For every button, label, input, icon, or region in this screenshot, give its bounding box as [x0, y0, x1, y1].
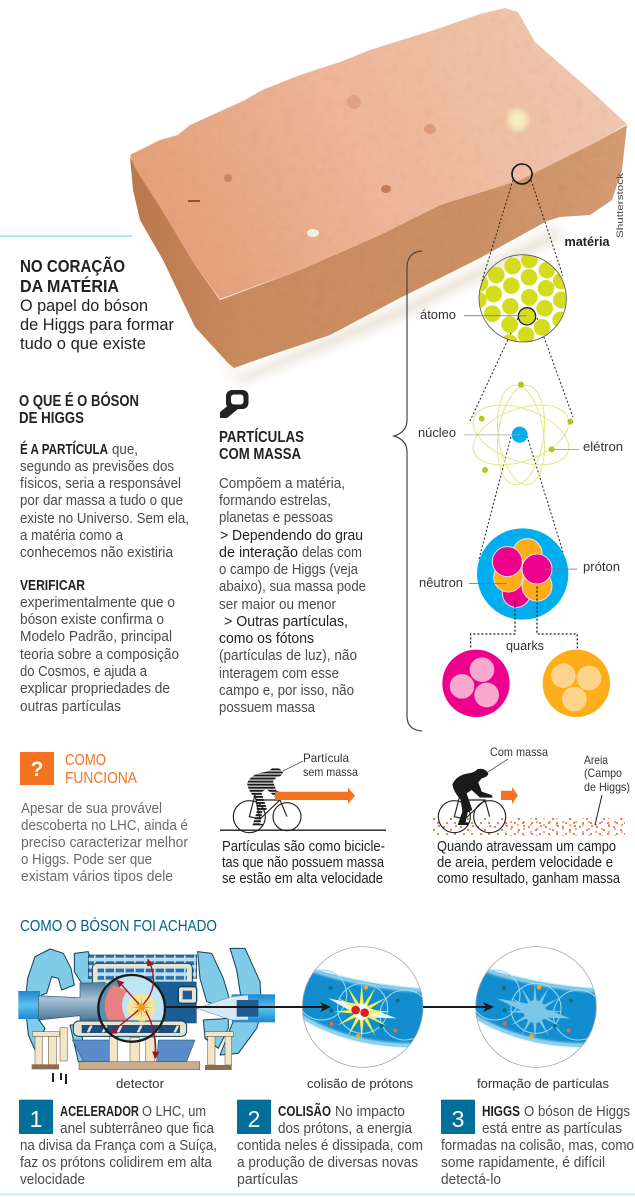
panel: step 3 higgs: 3 — [452, 1106, 464, 1132]
bottom rule — [0, 1194, 635, 1195]
panel: step 3 higgs: detectá-lo — [441, 1172, 501, 1188]
panel: partículas com massa: interagem com esse — [219, 666, 339, 682]
panel: o que é o bóson de Higgs: físicos, seria a responsável — [20, 476, 181, 492]
arrow: slow — [501, 787, 518, 804]
panel: partículas com massa: abaixo), sua massa pode — [219, 579, 366, 595]
panel: step 2 colisão: 2 — [248, 1106, 260, 1132]
panel: o que é o bóson de Higgs: a matéria como a — [20, 528, 124, 544]
diagram: nucleus — [469, 528, 577, 648]
panel: o que é o bóson de Higgs: segundo as previsões dos — [20, 459, 174, 475]
panel: partículas com massa: (partículas de luz), não — [219, 648, 357, 664]
top rule — [0, 236, 132, 237]
panel: step 1 acelerador: na divisa da França com a Suíça, — [20, 1138, 217, 1154]
arrow: beam line — [165, 1002, 494, 1012]
panel: step 1 acelerador: O LHC, um — [142, 1104, 206, 1120]
text: cyclist with mass caption: de areia, perdem velocidade e — [437, 855, 613, 871]
panel: partículas com massa: como os fótons — [219, 631, 314, 647]
panel: partículas com massa: > Outras partículas, — [224, 614, 348, 630]
title: NO CORAÇÃO — [20, 255, 125, 276]
icon: magnifier — [220, 390, 248, 418]
label: colisão de prótons: colisão de prótons — [307, 1076, 413, 1091]
panel: partículas com massa: planetas e pessoas — [219, 510, 333, 526]
illustration: cyclist without mass — [220, 751, 386, 833]
title: tudo o que existe — [20, 334, 146, 353]
panel: partículas com massa: o campo de Higgs (veja — [219, 562, 359, 578]
panel: como funciona: o Higgs. Pode ser que — [21, 852, 152, 868]
panel: step 2 colisão — [237, 1099, 423, 1188]
panel: como funciona: preciso caracterizar melhor — [21, 835, 188, 851]
title: DA MATÉRIA — [20, 275, 119, 296]
panel: o que é o bóson de Higgs: DE HIGGS — [19, 410, 84, 427]
illustration: detector — [18, 948, 275, 1070]
panel: o que é o bóson de Higgs: explicar propriedades de — [20, 681, 170, 697]
panel: como funciona: existam vários tipos dele — [21, 869, 173, 885]
icon: tiny people beside detector — [52, 1073, 67, 1084]
panel: step 1 acelerador: ACELERADOR — [60, 1104, 139, 1120]
panel: como funciona: COMO — [65, 752, 106, 769]
icon: question box — [20, 752, 54, 785]
label: elétron: elétron — [583, 439, 623, 454]
illustration: cyclist without mass: Partícula — [303, 751, 349, 765]
panel: como funciona: FUNCIONA — [65, 770, 137, 787]
panel: partículas com massa: > Dependendo do grau — [220, 528, 363, 544]
label: detector: detector — [116, 1076, 165, 1091]
panel: step 1 acelerador: anel subterrâneo que fica — [60, 1121, 215, 1137]
panel: o que é o bóson de Higgs: outras partículas — [20, 699, 121, 715]
icon: question box: ? — [31, 758, 43, 781]
label: formação de partículas: formação de partículas — [477, 1076, 609, 1091]
photo: brick — [130, 8, 627, 385]
diagram: quark magenta — [442, 650, 510, 717]
panel: step 2 colisão: No impacto — [335, 1104, 405, 1120]
panel: partículas com massa: de interação — [219, 545, 298, 561]
panel: o que é o bóson de Higgs: teoria sobre a composição — [20, 647, 179, 663]
title: de Higgs para formar — [20, 315, 174, 334]
panel: step 2 colisão: contida neles é dissipada, com — [237, 1138, 423, 1154]
text: cyclist with mass caption: Quando atravessam um campo — [437, 839, 616, 855]
panel: step 2 colisão: a produção de diversas novas — [237, 1155, 418, 1171]
title: O papel do bóson — [20, 296, 148, 315]
panel: o que é o bóson de Higgs: existe no Universo. Sem ela, — [20, 511, 189, 527]
panel: step 1 acelerador — [19, 1099, 217, 1188]
text: cyclist without mass caption — [222, 839, 385, 887]
panel: partículas com massa: possuem massa — [219, 700, 316, 716]
text: cyclist without mass caption: tas que não possuem massa — [222, 855, 385, 871]
panel: o que é o bóson de Higgs: experimentalmente que o — [20, 595, 175, 611]
panel: partículas com massa: PARTÍCULAS — [219, 427, 304, 446]
panel: step 2 colisão: partículas — [237, 1172, 298, 1188]
illustration: particle formation circle — [470, 947, 603, 1067]
panel: o que é o bóson de Higgs: do Cosmos, e ajuda a — [20, 664, 148, 680]
panel: como funciona: descoberta no LHC, ainda é — [21, 818, 188, 834]
diagram: quark orange — [543, 650, 610, 717]
panel: como funciona: Apesar de sua provável — [21, 801, 162, 817]
panel: step 1 acelerador: velocidade — [20, 1172, 85, 1188]
diagram: atom — [464, 382, 579, 488]
panel: partículas com massa: ser maior ou menor — [219, 597, 336, 613]
panel: step 2 colisão: COLISÃO — [278, 1102, 331, 1120]
illustration: proton collision circle — [297, 947, 430, 1067]
panel: partículas com massa — [219, 427, 366, 716]
panel: o que é o bóson de Higgs: por dar massa a tudo o que — [20, 493, 183, 509]
illustration: cyclist with mass in sand: Areia — [584, 753, 608, 767]
panel: partículas com massa: Compõem a matéria, — [219, 476, 345, 492]
panel: o que é o bóson de Higgs: que, — [112, 442, 138, 458]
text: cyclist without mass caption: se estão em alta velocidade — [222, 871, 383, 887]
panel: como funciona — [20, 752, 188, 885]
panel: o que é o bóson de Higgs: VERIFICAR — [20, 578, 85, 594]
label: nêutron: nêutron — [419, 575, 463, 590]
text: cyclist with mass caption — [437, 839, 621, 887]
panel: o que é o bóson de Higgs: Modelo Padrão, principal — [20, 629, 172, 645]
panel: partículas com massa: COM MASSA — [219, 446, 301, 463]
panel: o que é o bóson de Higgs — [19, 391, 189, 715]
panel: partículas com massa: delas com — [302, 545, 362, 561]
credit: Shutterstock: Shutterstock — [615, 173, 626, 238]
panel: step 3 higgs: some rapidamente, é difícil — [441, 1155, 605, 1171]
label: matéria: matéria — [564, 234, 610, 249]
panel: step 1 acelerador: 1 — [30, 1106, 42, 1132]
panel: o que é o bóson de Higgs: conhecemos não existiria — [20, 545, 174, 561]
icon: brick zoom circle — [512, 164, 532, 184]
panel: o que é o bóson de Higgs: É A PARTÍCULA — [20, 441, 108, 458]
label: quarks: quarks — [506, 638, 544, 653]
label: átomo: átomo — [420, 307, 456, 322]
panel: partículas com massa: campo e, por isso, não — [219, 683, 354, 699]
title — [20, 255, 174, 353]
label: próton: próton — [583, 559, 620, 574]
illustration: cyclist with mass in sand: Com massa — [490, 745, 548, 759]
panel: step 3 higgs — [441, 1099, 634, 1188]
illustration: cyclist with mass in sand: (Campo — [584, 766, 622, 780]
illustration: cyclist with mass in sand: de Higgs) — [584, 780, 630, 794]
diagram: matéria circle — [464, 254, 567, 342]
panel: partículas com massa: formando estrelas, — [219, 493, 331, 509]
zoom lines: dotted connectors — [470, 180, 573, 559]
illustration: cyclist without mass: sem massa — [303, 765, 358, 779]
heading: como o bóson foi achado: COMO O BÓSON FOI ACHADO — [20, 916, 217, 935]
panel: step 3 higgs: HIGGS — [482, 1104, 520, 1120]
bracket — [394, 251, 422, 731]
arrow: fast — [275, 788, 355, 804]
illustration: cyclist with mass in sand — [431, 745, 630, 836]
label: núcleo: núcleo — [418, 425, 456, 440]
text: cyclist without mass caption: Partículas são como bicicle- — [222, 839, 385, 855]
panel: step 1 acelerador: faz os prótons colidirem em alta — [20, 1155, 213, 1171]
panel: o que é o bóson de Higgs: bóson existe confirma o — [20, 612, 164, 628]
panel: o que é o bóson de Higgs: O QUE É O BÓSON — [19, 391, 139, 410]
panel: step 2 colisão: dos prótons, a energia — [278, 1121, 413, 1137]
panel: step 3 higgs: está entre as partículas — [482, 1121, 622, 1137]
